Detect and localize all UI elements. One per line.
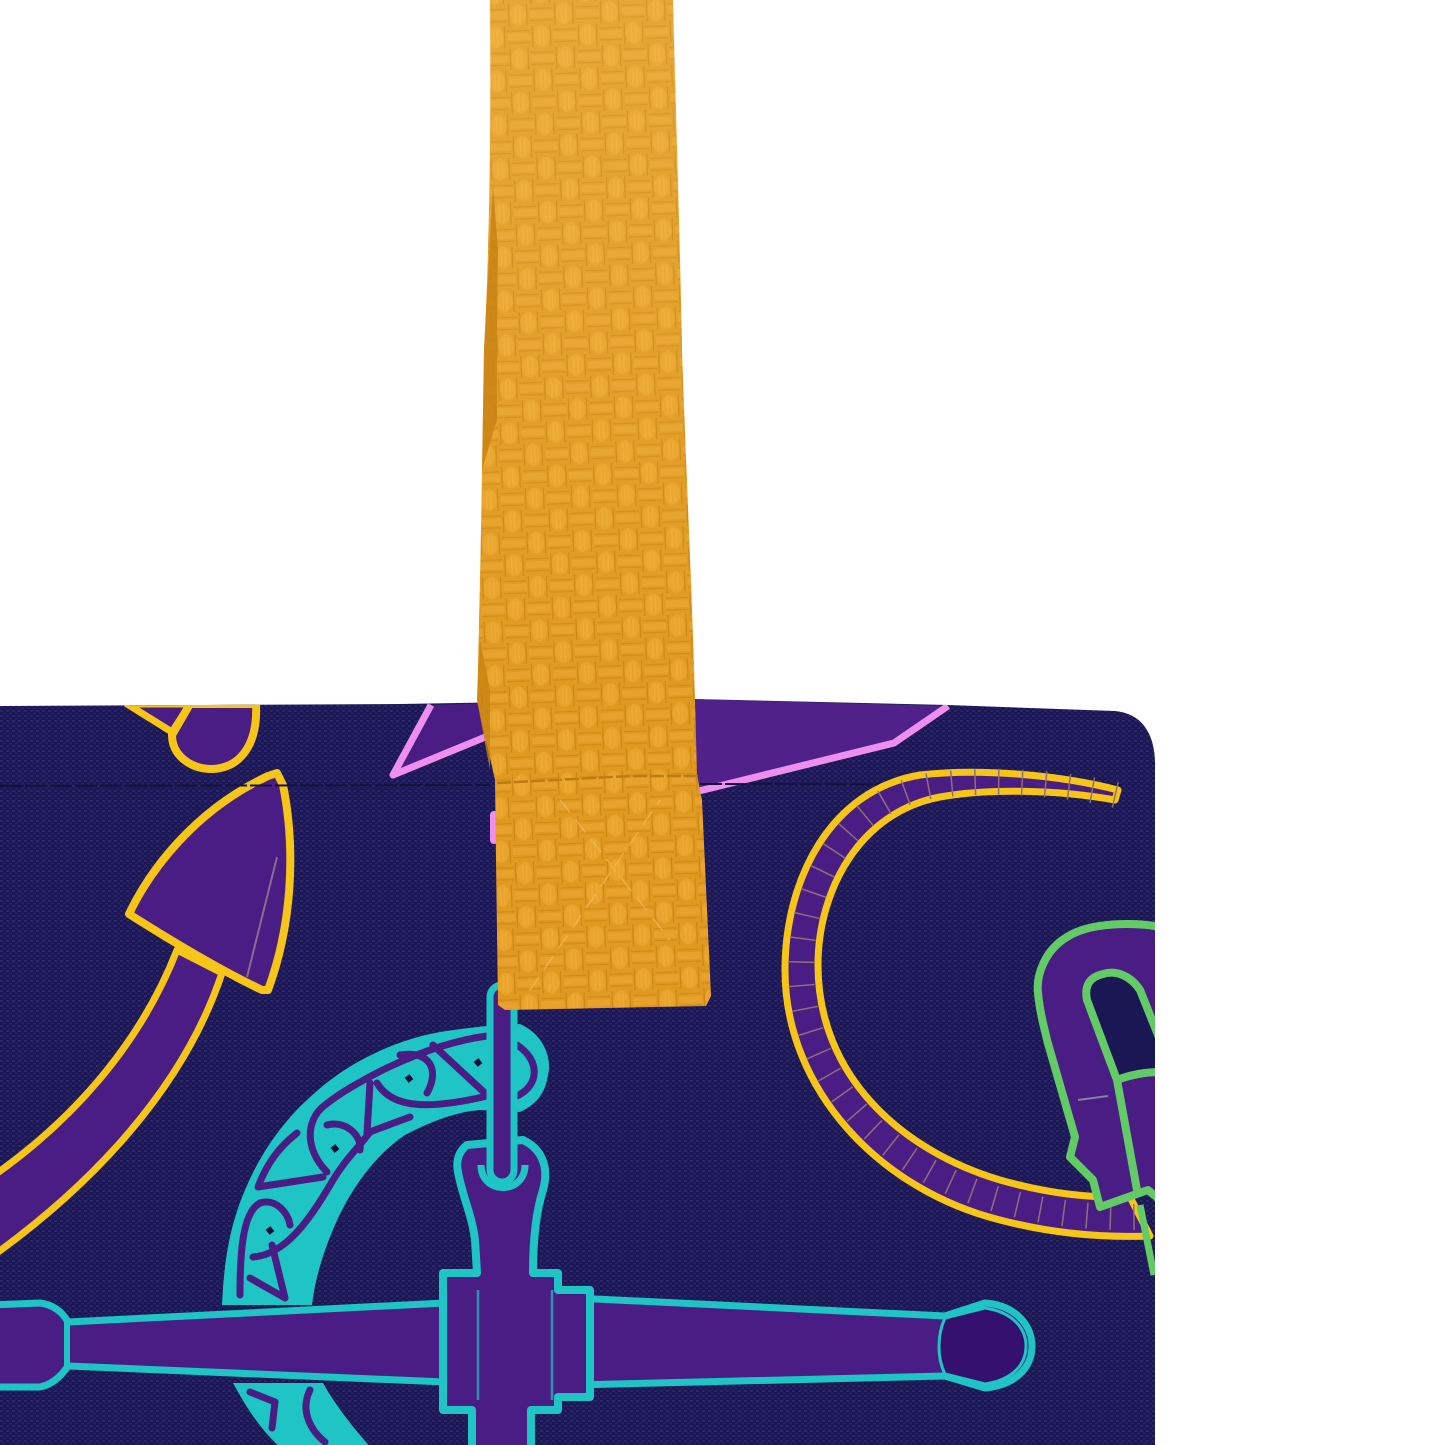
bag body: [0, 699, 1155, 1445]
bag pattern: [0, 699, 1160, 1445]
icon: yellow rope ring: [785, 772, 1150, 1236]
icon: teal cheek piece and centre block: [443, 985, 590, 1445]
icon: teal celtic ring: [222, 1024, 549, 1445]
orange fabric strap: [477, 0, 711, 1010]
icon: yellow spade-ended whip: [0, 773, 290, 1265]
icon: pink pennant behind strap: [393, 699, 948, 840]
strap stitched fold: [497, 776, 700, 783]
top seam: [0, 784, 1125, 786]
icon: teal bit bars: [0, 1298, 1032, 1388]
icon: top-left yellow ring fragment: [127, 704, 256, 769]
icon: green carabiner link: [1038, 924, 1160, 1275]
product photo: tote bag close-up: [0, 0, 1156, 1445]
